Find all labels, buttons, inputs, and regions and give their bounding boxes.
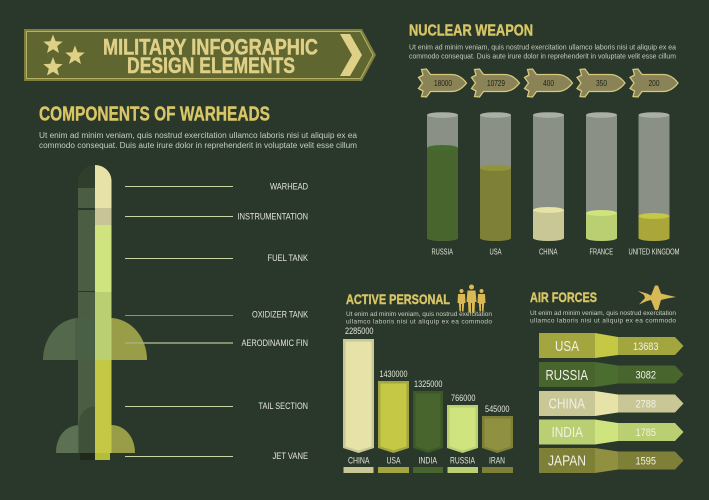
bar: Iran: IRAN bbox=[489, 456, 505, 466]
part labels: FUEL TANK bbox=[268, 253, 309, 264]
bar: China bbox=[343, 326, 374, 473]
bar: India bbox=[413, 379, 443, 473]
bar: Russia: RUSSIA bbox=[450, 456, 475, 466]
row: China: CHINA bbox=[548, 396, 585, 412]
left fins bbox=[43, 318, 95, 360]
text block: air forces description: ullamco laboris nisi ut aliquip ex ea commodo bbox=[530, 318, 676, 324]
cylinder: United Kingdom bbox=[638, 112, 670, 241]
row: Japan bbox=[539, 448, 684, 473]
right fins bbox=[95, 318, 147, 360]
title banner bbox=[24, 29, 376, 81]
row: India bbox=[539, 420, 684, 444]
icon: chevron bbox=[340, 34, 362, 76]
bullet 400: 400 bbox=[543, 79, 554, 88]
row: USA bbox=[539, 333, 684, 358]
heading: air forces: AIR FORCES bbox=[530, 289, 597, 305]
text block: nuclear description: Ut enim ad minim veniam, quis nostrud exercitation ullamco laboris nisi ut aliquip ex ea bbox=[409, 44, 676, 52]
row: USA: 13683 bbox=[633, 341, 658, 353]
row: Japan: JAPAN bbox=[548, 452, 586, 470]
rocket diagram bbox=[43, 165, 147, 460]
bar: Iran: 545000 bbox=[485, 404, 510, 415]
part labels: OXIDIZER TANK bbox=[252, 310, 309, 320]
bullet 18000 bbox=[418, 69, 466, 97]
cylinder labels: FRANCE bbox=[590, 248, 613, 256]
bar: USA: 1430000 bbox=[380, 369, 408, 380]
heading: components of warheads: COMPONENTS OF WARHEADS bbox=[39, 104, 270, 126]
cylinder: China bbox=[533, 112, 564, 241]
bar: Russia bbox=[447, 393, 478, 473]
bullet 10729: 10729 bbox=[487, 79, 505, 88]
row: Japan: 1595 bbox=[636, 456, 656, 468]
row: Russia: RUSSIA bbox=[546, 367, 588, 384]
row: Russia: 3082 bbox=[636, 370, 656, 382]
part labels: INSTRUMENTATION bbox=[238, 212, 308, 222]
cylinder labels: RUSSIA bbox=[432, 248, 453, 256]
text block: components description bbox=[39, 131, 358, 150]
cylinder labels: CHINA bbox=[539, 248, 558, 256]
text block: components description: Ut enim ad minim veniam, quis nostrud exercitation ullamco laboris nisi ut aliquip ex ea bbox=[39, 131, 358, 140]
cylinder labels bbox=[432, 248, 680, 256]
row: Russia bbox=[539, 362, 684, 387]
text block: air forces description: Ut enim ad minim veniam, quis nostrud exercitation bbox=[530, 310, 676, 317]
icon: three stars bbox=[43, 34, 85, 76]
rocket right sections bbox=[95, 165, 112, 208]
bar: USA bbox=[378, 369, 409, 473]
row: India: INDIA bbox=[552, 424, 583, 441]
bullet 200 bbox=[630, 69, 678, 97]
air forces ranking bbox=[539, 333, 684, 473]
part labels: JET VANE bbox=[272, 451, 308, 462]
row: China: 2788 bbox=[636, 398, 656, 410]
text block: active personal description: ullamco laboris nisi ut aliquip ex ea commodo bbox=[346, 318, 492, 326]
row: China bbox=[539, 391, 684, 416]
cylinder: USA bbox=[480, 112, 511, 241]
title text bbox=[103, 34, 318, 78]
bullet 350: 350 bbox=[596, 79, 607, 88]
heading: nuclear weapon: NUCLEAR WEAPON bbox=[409, 22, 533, 40]
icon: fighter jet bbox=[638, 286, 676, 310]
text block: nuclear description: commodo consequat. Duis aute irure dolor in reprehenderit in voluptate velit esse cillum bbox=[409, 54, 676, 60]
bar: USA: USA bbox=[386, 456, 401, 466]
text block: components description: commodo consequat. Duis aute irure dolor in reprehenderit in voluptate velit esse cillum bbox=[39, 141, 357, 150]
text block: nuclear description bbox=[409, 44, 676, 60]
row: India: 1785 bbox=[636, 427, 656, 439]
part labels: WARHEAD bbox=[270, 182, 308, 192]
part labels: AERODINAMIC FIN bbox=[242, 338, 308, 349]
bullet 18000: 18000 bbox=[434, 79, 452, 88]
bullet 350 bbox=[577, 69, 625, 97]
bar: India: INDIA bbox=[418, 456, 437, 466]
bullet value badges bbox=[418, 69, 678, 97]
title text: MILITARY INFOGRAPHIC bbox=[103, 34, 318, 60]
leader lines and part labels bbox=[125, 182, 309, 462]
cylinder: France bbox=[586, 112, 617, 241]
part labels: TAIL SECTION bbox=[258, 401, 308, 412]
bullet 10729 bbox=[472, 69, 520, 97]
bar: India: 1325000 bbox=[414, 379, 442, 390]
bar: China: CHINA bbox=[348, 456, 370, 466]
cylinder chart bbox=[427, 112, 680, 256]
text block: air forces description bbox=[530, 310, 676, 324]
bar: China: 2285000 bbox=[345, 326, 374, 337]
heading: active personal: ACTIVE PERSONAL bbox=[346, 291, 450, 307]
row: USA: USA bbox=[555, 338, 579, 355]
bar chart: active personal bbox=[343, 326, 513, 473]
part labels bbox=[238, 182, 309, 462]
icon: soldiers bbox=[458, 284, 486, 312]
rocket left body bbox=[78, 165, 95, 188]
text block: active personal description bbox=[346, 311, 492, 326]
cylinder labels: USA bbox=[490, 248, 502, 256]
bullet 200: 200 bbox=[648, 79, 660, 88]
text block: active personal description: Ut enim ad minim veniam, quis nostrud exercitation bbox=[346, 311, 492, 318]
cylinder labels: UNITED KINGDOM bbox=[628, 248, 680, 256]
title text: DESIGN ELEMENTS bbox=[127, 53, 295, 78]
cylinder: Russia bbox=[427, 112, 458, 241]
bar: Iran bbox=[482, 404, 513, 473]
bar: Russia: 766000 bbox=[451, 393, 476, 404]
bullet 400 bbox=[524, 69, 572, 97]
